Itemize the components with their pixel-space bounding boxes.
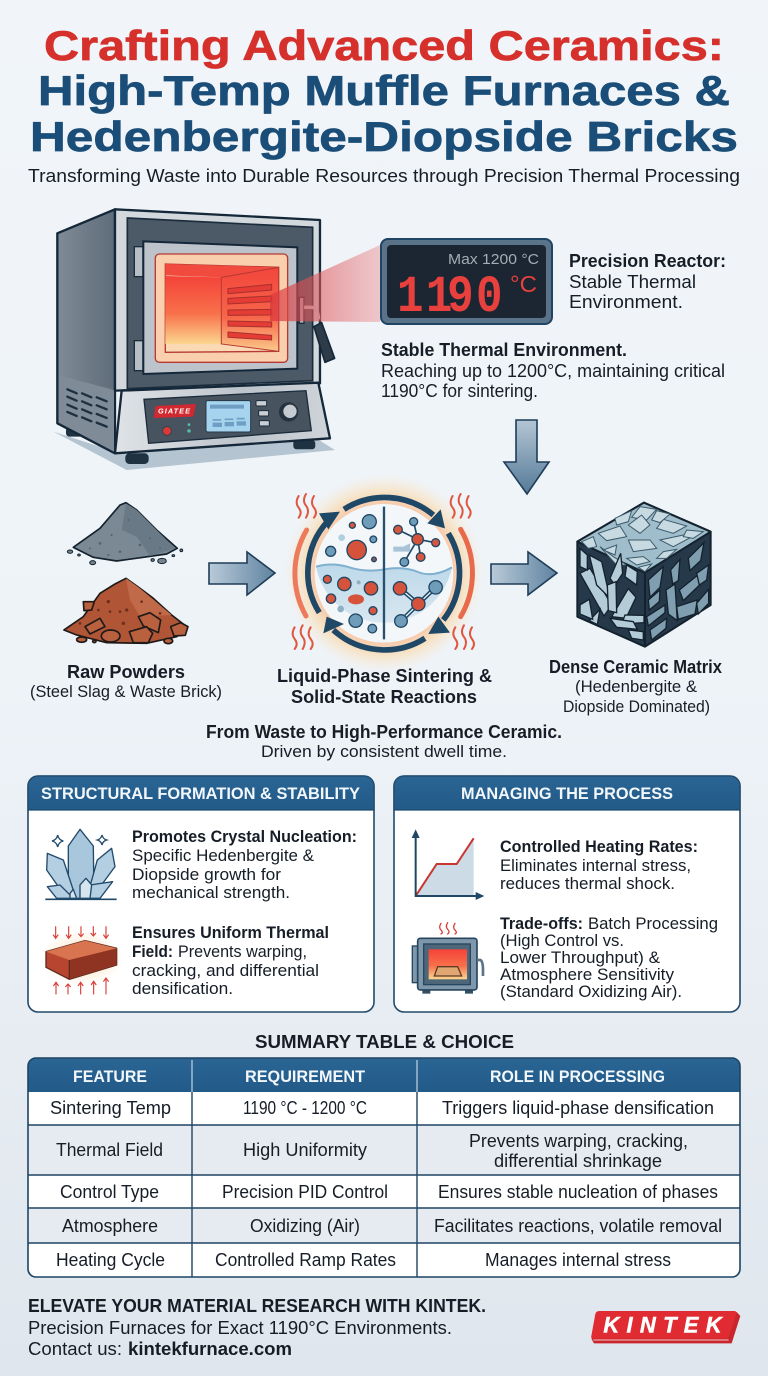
table row: atmosphere: Atmosphere	[62, 1216, 158, 1236]
caption: waste to ceramic	[206, 722, 562, 761]
panel: structural formation	[28, 776, 374, 1012]
label: sintering: Liquid-Phase Sintering &	[277, 666, 492, 686]
text: trade-offs: (High Control vs.	[500, 932, 624, 950]
text: heating rates: Eliminates internal stress,	[500, 857, 691, 875]
caption: waste to ceramic: From Waste to High-Performance Ceramic.	[206, 722, 562, 742]
label: sintering	[277, 666, 492, 707]
footer call to action: Contact us:	[28, 1339, 122, 1359]
text: trade-offs: Trade-offs:	[500, 915, 583, 933]
text: precision reactor: Stable Thermal	[569, 272, 696, 292]
icon: dense ceramic cube	[577, 503, 711, 647]
text: trade-offs	[500, 915, 718, 1001]
table row: heating cycle: Manages internal stress	[485, 1250, 671, 1270]
arrow: down	[504, 420, 549, 494]
text: trade-offs: Lower Throughput) &	[500, 949, 660, 967]
text: trade-offs: Atmosphere Sensitivity	[500, 966, 675, 984]
icon: muffle furnace	[53, 209, 335, 470]
text: heating rates	[500, 838, 698, 893]
panel heading: MANAGING THE PROCESS	[461, 784, 673, 803]
text: crystal nucleation: Promotes Crystal Nucleation:	[132, 828, 357, 846]
text: stable thermal environment: Reaching up to 1200°C, maintaining critical	[381, 361, 725, 381]
title: Crafting Advanced Ceramics:	[44, 22, 724, 69]
heat beam	[270, 245, 380, 322]
text: precision reactor	[569, 251, 726, 312]
table row: control type	[60, 1182, 718, 1202]
table row: thermal field: differential shrinkage	[494, 1151, 662, 1171]
text: thermal field: Prevents warping,	[178, 943, 307, 961]
text: thermal field: cracking, and differential	[132, 962, 319, 980]
icon: raw powder piles	[64, 503, 188, 644]
text: heating rates: reduces thermal shock.	[500, 875, 675, 893]
table row: sintering temp: Sintering Temp	[50, 1098, 171, 1118]
text: precision reactor: Environment.	[569, 292, 683, 312]
heading: summary table: SUMMARY TABLE & CHOICE	[255, 1032, 514, 1052]
text: thermal field: densification.	[132, 980, 233, 998]
text: trade-offs: Batch Processing	[588, 915, 718, 933]
icon: brick with heat arrows	[40, 927, 123, 994]
label: raw powders	[30, 662, 222, 701]
logo: kintek: KINTEK	[603, 1313, 724, 1338]
digital temperature display: °C	[510, 271, 537, 297]
table row: thermal field: High Uniformity	[243, 1140, 367, 1160]
text: stable thermal environment	[381, 340, 725, 401]
label: dense matrix: Dense Ceramic Matrix	[549, 657, 722, 677]
text: crystal nucleation: Diopside growth for	[132, 866, 282, 884]
icon: muffle furnace: GIATEE	[158, 406, 191, 415]
table row: thermal field: Prevents warping, cracking,	[469, 1131, 688, 1151]
icon: heating rate chart	[412, 829, 484, 900]
text: thermal field: Field:	[132, 943, 173, 961]
table header row: REQUIREMENT	[245, 1068, 365, 1086]
table row: control type: Precision PID Control	[222, 1182, 388, 1202]
table row: atmosphere	[62, 1216, 722, 1236]
table header row	[73, 1068, 665, 1086]
text: crystal nucleation: Specific Hedenbergite &	[132, 847, 314, 865]
text: thermal field	[132, 924, 329, 998]
digital temperature display: Max 1200 °C	[448, 251, 539, 268]
table row: atmosphere: Facilitates reactions, volatile removal	[434, 1216, 722, 1236]
icon: crystals	[45, 829, 117, 899]
text: stable thermal environment: 1190°C for sintering.	[381, 381, 538, 401]
logo: kintek	[591, 1311, 740, 1343]
text: thermal field: Ensures Uniform Thermal	[132, 924, 329, 942]
footer call to action	[28, 1295, 486, 1359]
table row: thermal field: Thermal Field	[56, 1140, 163, 1160]
panel heading: STRUCTURAL FORMATION & STABILITY	[41, 784, 361, 803]
label: dense matrix: (Hedenbergite &	[575, 677, 698, 696]
title: High-Temp Muffle Furnaces &	[38, 67, 730, 114]
text: trade-offs: (Standard Oxidizing Air).	[500, 983, 682, 1001]
label: dense matrix	[549, 657, 722, 716]
table row: control type: Control Type	[60, 1182, 159, 1202]
caption: waste to ceramic: Driven by consistent dwell time.	[261, 742, 507, 761]
table row: sintering temp: 1190 °C - 1200 °C	[243, 1098, 367, 1118]
title: Hedenbergite-Diopside Bricks	[30, 113, 738, 160]
text: stable thermal environment: Stable Thermal Environment.	[381, 340, 627, 360]
text: precision reactor: Precision Reactor:	[569, 251, 726, 271]
table header row: ROLE IN PROCESSING	[490, 1068, 665, 1086]
summary table	[28, 1058, 740, 1277]
footer call to action: ELEVATE YOUR MATERIAL RESEARCH WITH KINTEK.	[28, 1295, 486, 1316]
table row: thermal field	[56, 1131, 688, 1171]
subtitle: Transforming Waste into Durable Resources through Precision Thermal Processing	[28, 166, 740, 186]
table row: heating cycle: Controlled Ramp Rates	[215, 1250, 396, 1270]
table row: control type: Ensures stable nucleation of phases	[438, 1182, 718, 1202]
panel: managing the process	[394, 776, 740, 1012]
arrow: sintering to matrix	[491, 552, 557, 595]
table row: sintering temp	[50, 1098, 714, 1118]
label: raw powders: (Steel Slag & Waste Brick)	[30, 682, 222, 701]
label: sintering: Solid-State Reactions	[291, 687, 477, 707]
footer call to action: Precision Furnaces for Exact 1190°C Environments.	[28, 1318, 452, 1338]
table row: heating cycle	[56, 1250, 671, 1270]
icon: small batch furnace	[412, 923, 483, 994]
label: dense matrix: Diopside Dominated)	[563, 697, 710, 716]
text: heating rates: Controlled Heating Rates:	[500, 838, 698, 856]
text: crystal nucleation	[132, 828, 357, 902]
digital temperature display	[381, 239, 552, 327]
arrow: powders to sintering	[209, 552, 275, 595]
table header row: FEATURE	[73, 1068, 147, 1086]
table row: heating cycle: Heating Cycle	[56, 1250, 165, 1270]
text: crystal nucleation: mechanical strength.	[132, 884, 290, 902]
title	[30, 22, 738, 160]
footer call to action: kintekfurnace.com	[128, 1339, 292, 1359]
label: raw powders: Raw Powders	[67, 662, 185, 682]
digital temperature display: 1190	[397, 269, 503, 327]
icon: sintering reaction circle	[284, 473, 484, 673]
table row: sintering temp: Triggers liquid-phase densification	[442, 1098, 714, 1118]
table row: atmosphere: Oxidizing (Air)	[250, 1216, 360, 1236]
